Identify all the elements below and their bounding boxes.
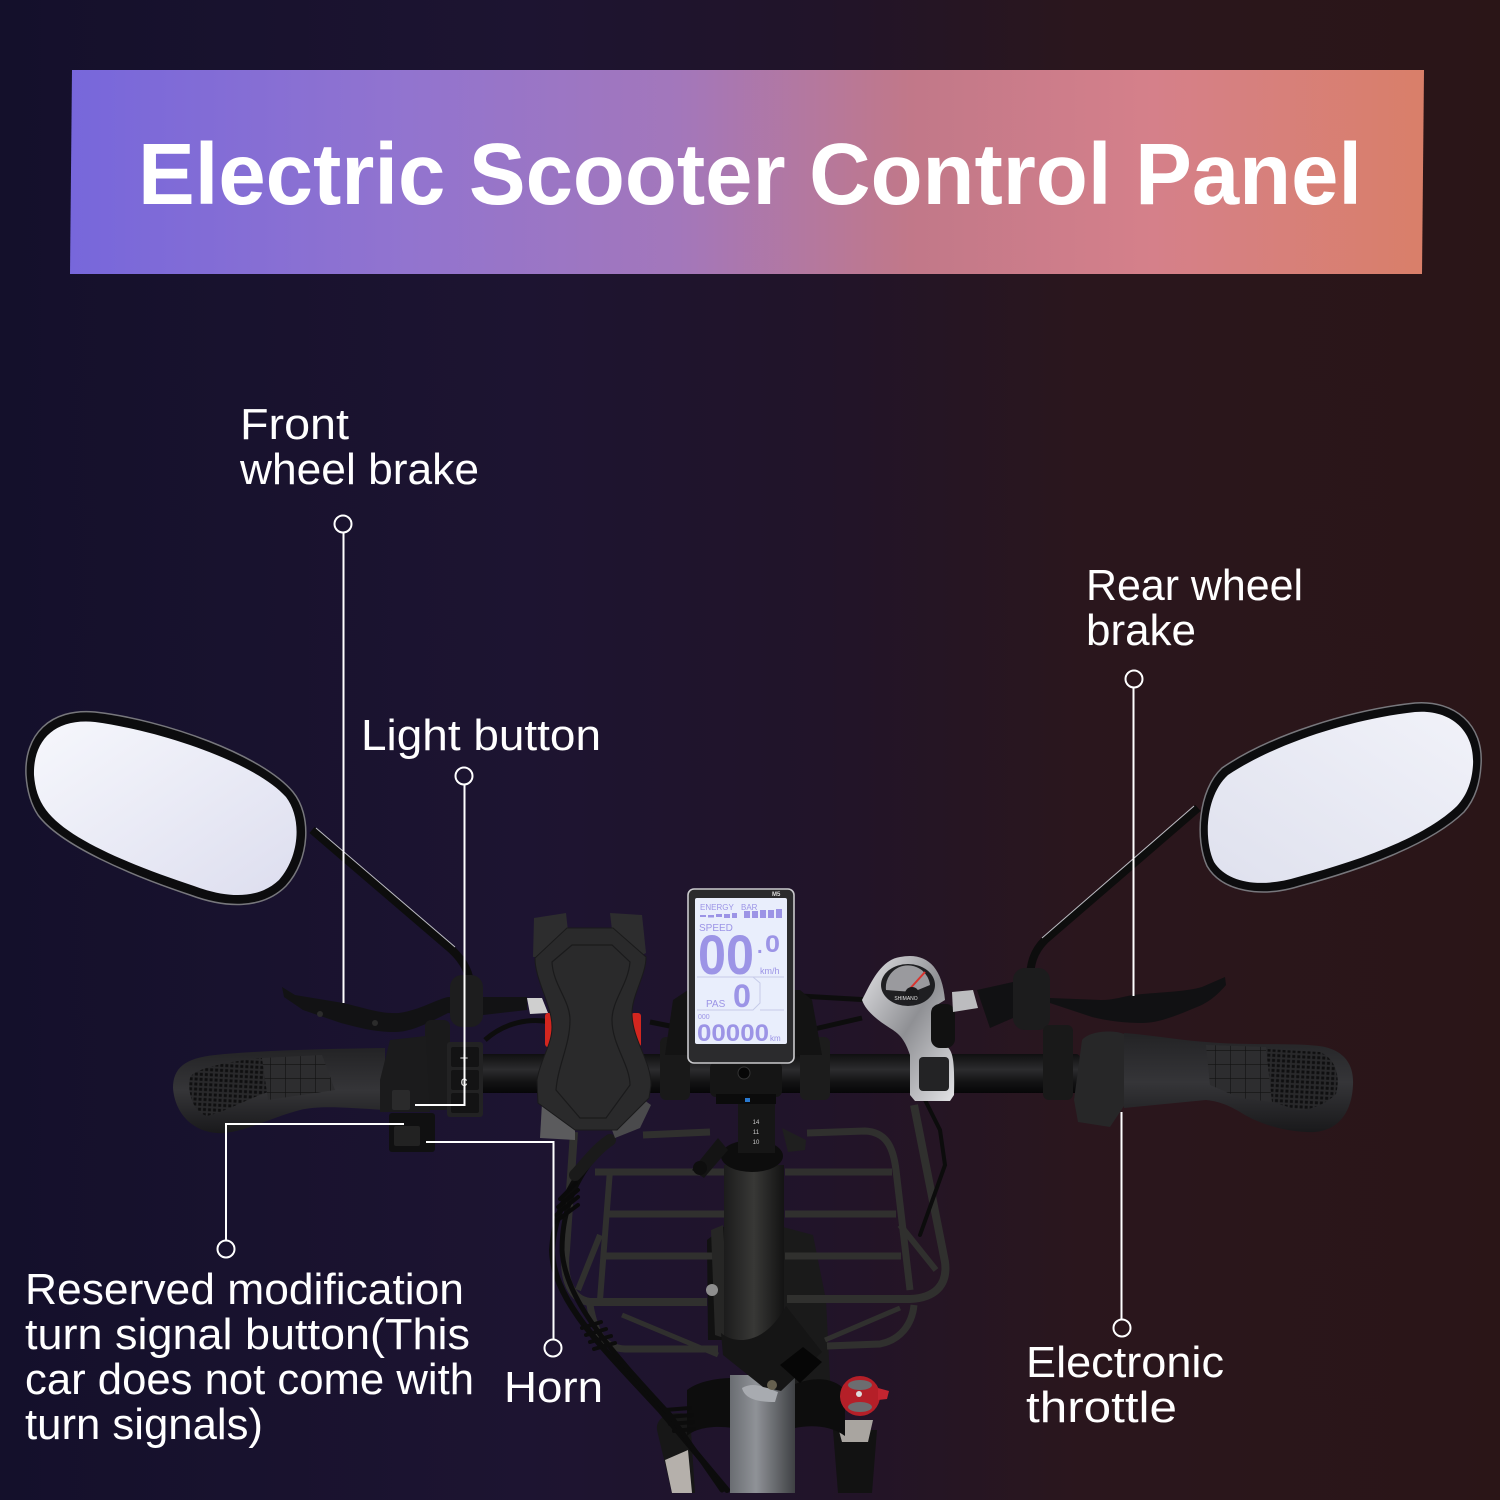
LCD display: 0	[733, 978, 751, 1014]
electronic throttle grip	[1074, 1032, 1353, 1132]
callout: light button	[361, 711, 601, 1105]
label: Reserved modification	[25, 1265, 464, 1314]
light button pad: +	[460, 1050, 469, 1067]
label: Light button	[361, 711, 601, 760]
front fork and frame	[657, 1225, 877, 1493]
callout: reserved modification turn signal button	[25, 1124, 474, 1449]
LCD display: M5	[772, 892, 781, 898]
brake and signal cables	[552, 1100, 945, 1490]
left grip	[173, 1048, 385, 1133]
thumb shifter: SHIMANO	[894, 996, 918, 1002]
callout: rear wheel brake	[1086, 561, 1303, 996]
rear wheel brake lever	[977, 968, 1226, 1100]
light button pad	[447, 1042, 483, 1117]
label: turn signals)	[25, 1400, 263, 1449]
label: turn signal button(This	[25, 1310, 470, 1359]
LCD display: .	[757, 936, 763, 958]
left switch and horn blocks	[380, 1020, 450, 1152]
LCD display: BAR	[741, 903, 758, 912]
right mirror	[1030, 703, 1481, 980]
LCD display: 00	[698, 923, 754, 986]
stem and folding joint: 14	[753, 1120, 760, 1126]
LCD display: PAS	[706, 999, 726, 1010]
scooter photo illustration	[26, 703, 1481, 1493]
LCD display: 00000	[697, 1020, 769, 1047]
stem and folding joint	[692, 1098, 822, 1391]
front wheel brake lever	[282, 975, 548, 1032]
callout: electronic throttle	[1026, 1112, 1224, 1432]
phone holder	[533, 913, 651, 1140]
label: throttle	[1026, 1383, 1177, 1432]
left mirror	[26, 712, 470, 985]
LCD display: km	[770, 1034, 781, 1043]
callout: horn	[426, 1142, 603, 1412]
title: Electric Scooter Control Panel	[138, 126, 1362, 223]
label: car does not come with	[25, 1355, 474, 1404]
stem and folding joint: 11	[753, 1130, 760, 1136]
stem and folding joint: 10	[753, 1140, 760, 1146]
LCD display	[688, 889, 794, 1063]
label: Front	[240, 400, 349, 449]
front basket	[565, 1105, 945, 1355]
LCD display: ENERGY	[700, 903, 734, 912]
label: wheel brake	[239, 445, 479, 494]
label: Horn	[504, 1363, 603, 1412]
LCD display: SPEED	[699, 923, 733, 934]
LCD display: 0	[765, 931, 780, 958]
LCD display: km/h	[760, 966, 780, 976]
thumb shifter	[862, 956, 978, 1101]
label: Electronic	[1026, 1338, 1224, 1387]
LCD display: 000	[698, 1014, 710, 1021]
label: brake	[1086, 606, 1196, 655]
label: Rear wheel	[1086, 561, 1303, 610]
fork adjuster red knob	[840, 1376, 889, 1416]
callout: front wheel brake	[239, 400, 479, 1003]
display stem mount	[660, 990, 830, 1104]
light button pad: c	[460, 1073, 468, 1089]
title banner	[70, 70, 1424, 274]
handlebar	[440, 996, 1080, 1093]
